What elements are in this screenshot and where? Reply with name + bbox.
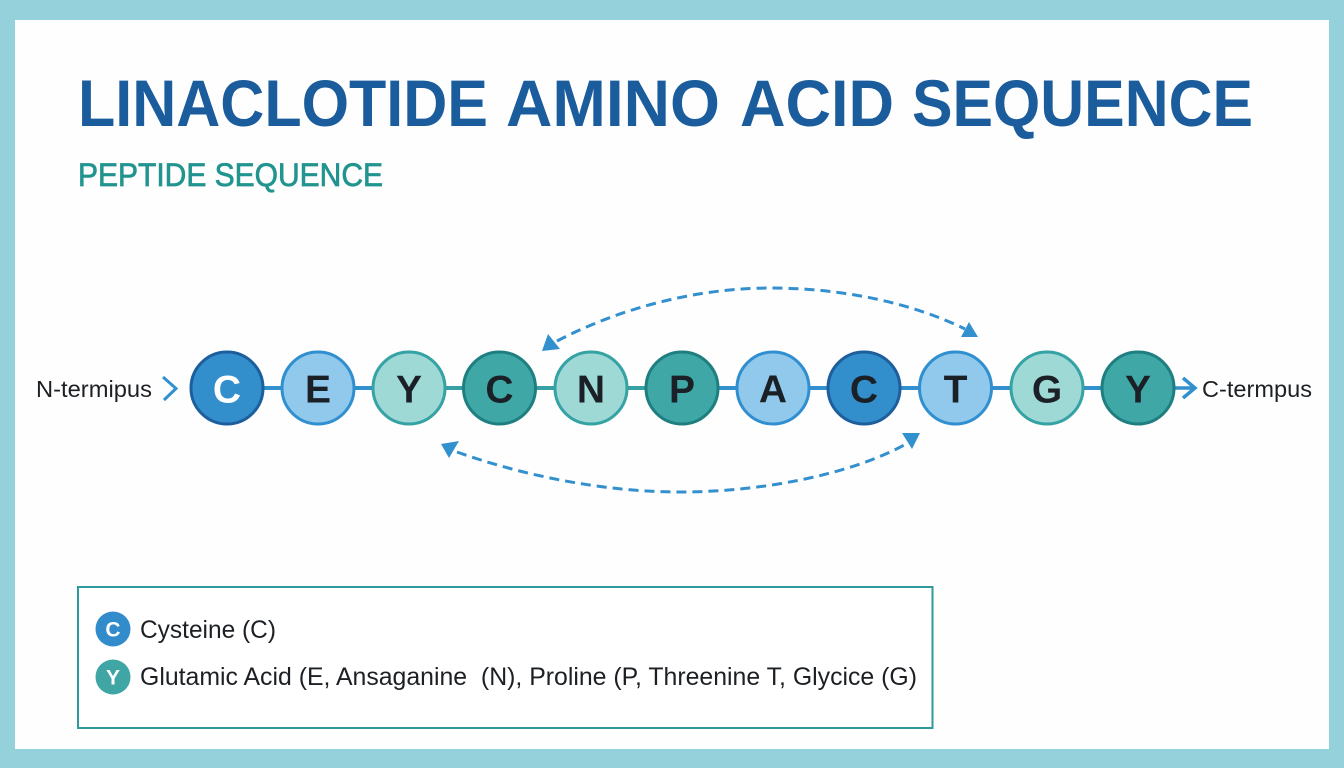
residue C8: C xyxy=(850,368,878,412)
title xyxy=(78,66,1253,140)
residue Y11: Y xyxy=(1125,368,1151,412)
residue A7: A xyxy=(759,368,787,412)
residue E2 xyxy=(282,352,354,424)
residue Y3 xyxy=(373,352,445,424)
subtitle: PEPTIDE SEQUENCE xyxy=(78,157,383,193)
residue C4 xyxy=(464,352,536,424)
residue G10: G xyxy=(1032,368,1062,412)
residue A7 xyxy=(737,352,809,424)
legend: other residues icon xyxy=(96,660,130,694)
residue T9 xyxy=(920,352,992,424)
legend: cysteine icon: C xyxy=(105,618,121,642)
residue C1: C xyxy=(213,368,241,412)
arrow: upper disulfide bond xyxy=(542,288,978,351)
peptide sequence diagram xyxy=(36,288,1312,492)
legend: other residues text: Glutamic Acid (E, Ansaganine (N), Proline (P, Threenine T, Glycice (G) xyxy=(140,663,917,691)
residue Y3: Y xyxy=(396,368,422,412)
residue N5: N xyxy=(577,368,605,412)
residue E2: E xyxy=(305,368,331,412)
C-terminus label: C-termpus xyxy=(1202,376,1312,402)
residue C4: C xyxy=(485,368,514,412)
peptide backbone line xyxy=(227,386,1138,390)
residue T9: T xyxy=(944,368,968,412)
arrow: C-terminus xyxy=(1172,378,1195,398)
legend: cysteine icon xyxy=(96,612,130,646)
N-terminus label: N-termipus xyxy=(36,376,152,402)
icon: N-terminus chevron xyxy=(163,377,176,400)
title: AMINO xyxy=(506,66,720,140)
residue Y11 xyxy=(1102,352,1174,424)
backbone teal segment Y to P xyxy=(409,386,682,390)
title: ACID xyxy=(740,66,894,140)
residue G10 xyxy=(1011,352,1083,424)
title: LINACLOTIDE xyxy=(78,66,488,140)
title: SEQUENCE xyxy=(912,66,1253,140)
legend: cysteine text: Cysteine (C) xyxy=(140,616,276,644)
legend: other residues icon: Y xyxy=(106,666,120,690)
arrow: lower disulfide bond xyxy=(441,433,920,492)
legend panel xyxy=(78,587,932,728)
residue P6: P xyxy=(669,368,695,412)
residue P6 xyxy=(646,352,718,424)
residue C8 xyxy=(828,352,900,424)
residue C1 xyxy=(191,352,263,424)
residue N5 xyxy=(555,352,627,424)
